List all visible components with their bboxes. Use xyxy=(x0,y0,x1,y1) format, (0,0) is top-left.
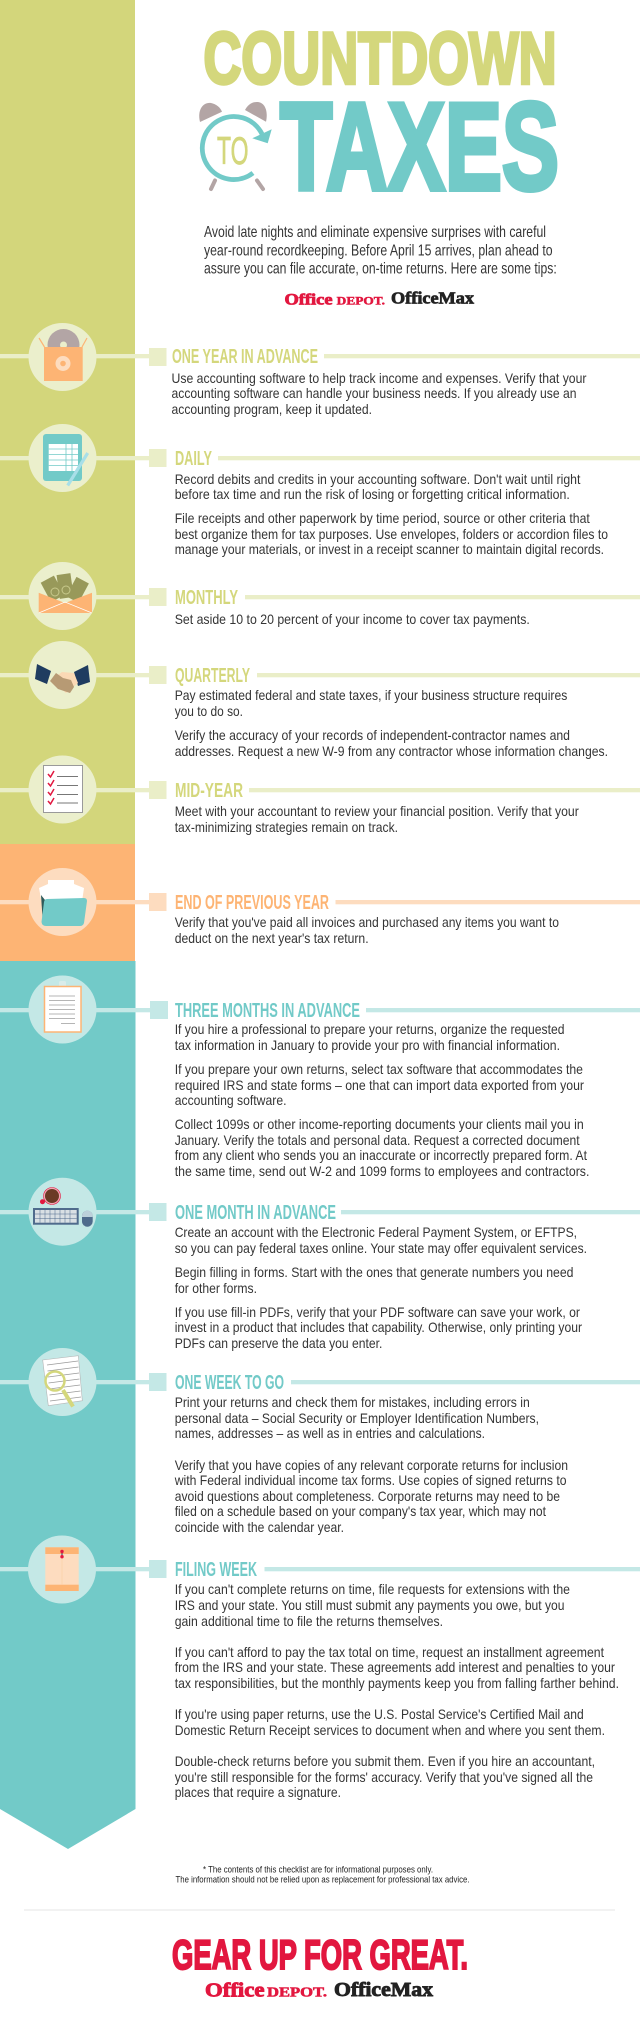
connector line xyxy=(0,456,150,460)
connector line xyxy=(0,788,150,792)
body text xyxy=(175,471,608,557)
heading rule xyxy=(264,1567,640,1571)
panel: one year in advance xyxy=(0,323,640,417)
body text: Meet with your accountant to review your financial position. Verify that your xyxy=(175,803,579,819)
heading rule xyxy=(245,595,640,599)
connector line xyxy=(0,1210,150,1214)
connector line xyxy=(0,1567,150,1571)
body text: the same time, send out W-2 and 1099 forms to employees and contractors. xyxy=(175,1163,589,1179)
body text: places that require a signature. xyxy=(175,1784,341,1800)
heading marker xyxy=(149,588,166,606)
heading marker xyxy=(149,348,166,366)
connector line xyxy=(0,673,150,677)
heading marker xyxy=(149,1560,166,1578)
heading: ONE YEAR IN ADVANCE xyxy=(172,345,318,368)
body text xyxy=(175,687,608,759)
body text: so you can pay federal taxes online. Your state may offer equivalent services. xyxy=(175,1240,587,1256)
heading marker xyxy=(149,1373,166,1391)
body text: If you can't complete returns on time, file requests for extensions with the xyxy=(175,1581,570,1597)
body text: personal data – Social Security or Employer Identification Numbers, xyxy=(175,1410,539,1426)
icon: alarm clock with TO: TO xyxy=(217,130,248,173)
body text: coincide with the calendar year. xyxy=(175,1519,344,1535)
body text: accounting program, keep it updated. xyxy=(172,401,372,417)
body text: January. Verify the totals and personal data. Request a corrected document xyxy=(175,1132,580,1148)
heading rule xyxy=(366,1008,640,1012)
body text: Verify the accuracy of your records of independent-contractor names and xyxy=(175,727,570,743)
timeline strip: green section xyxy=(0,0,135,844)
heading marker xyxy=(149,893,166,911)
heading: ONE MONTH IN ADVANCE xyxy=(175,1201,336,1224)
body text: Record debits and credits in your accounting software. Don't wait until right xyxy=(175,471,580,487)
body text: required IRS and state forms – one that can import data exported from your xyxy=(175,1077,584,1093)
body text xyxy=(175,914,559,946)
panel: one week to go xyxy=(0,1348,640,1535)
body text: tax information in January to provide your pro with financial information. xyxy=(175,1037,560,1053)
icon: clasp envelope xyxy=(28,1536,96,1604)
icon: alarm clock with TO xyxy=(199,102,272,189)
panel: one month in advance xyxy=(0,1178,640,1351)
heading marker xyxy=(149,666,166,684)
logos: Office Depot and OfficeMax: Office xyxy=(284,292,332,308)
intro text: Avoid late nights and eliminate expensive surprises with careful xyxy=(204,224,546,241)
icon: notebook with pen xyxy=(28,424,96,492)
disclaimer note: * The contents of this checklist are for informational purposes only. xyxy=(203,1864,433,1876)
disclaimer note: The information should not be relied upon as replacement for professional tax advice. xyxy=(176,1874,470,1886)
timeline strip: orange section xyxy=(0,844,135,961)
body text: If you prepare your own returns, select tax software that accommodates the xyxy=(175,1061,583,1077)
footer logos: Office Depot and OfficeMax xyxy=(205,1979,434,2002)
body text: Print your returns and check them for mistakes, including errors in xyxy=(175,1394,530,1410)
body text: deduct on the next year's tax return. xyxy=(175,930,369,946)
body text xyxy=(175,1581,619,1800)
body text: invest in a product that includes that capability. Otherwise, only printing your xyxy=(175,1319,582,1335)
footer logos: Office Depot and OfficeMax: Office xyxy=(205,1980,265,2002)
body text: IRS and your state. You still must submit any payments you owe, but you xyxy=(175,1597,564,1613)
icon: folder with papers xyxy=(28,868,96,936)
heading: THREE MONTHS IN ADVANCE xyxy=(175,999,360,1022)
body text xyxy=(175,803,579,835)
panel: monthly xyxy=(0,562,640,630)
timeline strip: teal section with arrow tip xyxy=(0,961,136,1849)
body text xyxy=(175,1224,587,1351)
icon: software box with disc xyxy=(28,323,96,391)
logos: Office Depot and OfficeMax: DEPOT. xyxy=(337,296,385,308)
icon: checklist xyxy=(28,756,96,824)
heading rule xyxy=(336,900,640,904)
body text: Use accounting software to help track income and expenses. Verify that your xyxy=(172,370,587,386)
body text: before tax time and run the risk of losing or forgetting critical information. xyxy=(175,486,570,502)
heading: DAILY xyxy=(175,447,212,470)
disclaimer note xyxy=(176,1864,470,1886)
heading: MONTHLY xyxy=(175,586,238,609)
footer logos: Office Depot and OfficeMax: OfficeMax xyxy=(334,1979,434,2001)
body text: Begin filling in forms. Start with the ones that generate numbers you need xyxy=(175,1264,573,1280)
body text: names, addresses – as well as in entries and calculations. xyxy=(175,1425,485,1441)
body text: Create an account with the Electronic Federal Payment System, or EFTPS, xyxy=(175,1224,577,1240)
body text: with Federal individual income tax forms. Use copies of signed returns to xyxy=(174,1472,567,1488)
body text xyxy=(175,1021,589,1179)
body text xyxy=(174,1394,568,1535)
body text: you to do so. xyxy=(175,703,243,719)
heading rule xyxy=(324,354,640,358)
logos: Office Depot and OfficeMax: OfficeMax xyxy=(391,288,475,308)
body text: gain additional time to file the returns themselves. xyxy=(175,1613,443,1629)
connector line xyxy=(0,900,150,904)
panel: daily xyxy=(0,424,640,557)
body text: from any client who sends you an inaccurate or incorrectly prepared form. At xyxy=(175,1147,587,1163)
body text: avoid questions about completeness. Corporate returns may need to be xyxy=(175,1488,560,1504)
body text: Collect 1099s or other income-reporting documents your clients mail you in xyxy=(175,1116,584,1132)
heading marker xyxy=(150,1001,168,1019)
footer slogan: GEAR UP FOR GREAT. xyxy=(172,1931,468,1978)
body text: Verify that you've paid all invoices and purchased any items you want to xyxy=(175,914,559,930)
body text: If you use fill-in PDFs, verify that your PDF software can save your work, or xyxy=(175,1304,580,1320)
footer logos: Office Depot and OfficeMax: DEPOT. xyxy=(267,1986,327,2001)
body text: Set aside 10 to 20 percent of your income to cover tax payments. xyxy=(175,611,530,627)
connector line xyxy=(0,595,150,599)
body text: filed on a schedule based on your company's tax year, which may not xyxy=(175,1503,546,1519)
icon: envelope with money xyxy=(28,562,96,630)
heading marker xyxy=(149,781,166,799)
body text: If you're using paper returns, use the U.S. Postal Service's Certified Mail and xyxy=(175,1706,584,1722)
icon: document with magnifier xyxy=(28,1348,96,1416)
heading: END OF PREVIOUS YEAR xyxy=(175,891,329,914)
icon: clipboard xyxy=(28,976,96,1044)
connector line xyxy=(0,1008,151,1012)
icon: coffee, keyboard and mouse xyxy=(28,1178,96,1246)
body text: Verify that you have copies of any relevant corporate returns for inclusion xyxy=(175,1457,568,1473)
heading: ONE WEEK TO GO xyxy=(175,1371,284,1394)
body text: accounting software can handle your business needs. If you already use an xyxy=(172,385,576,401)
heading marker xyxy=(149,449,166,467)
heading marker xyxy=(149,1203,166,1221)
panel: mid-year xyxy=(0,756,640,835)
icon: handshake xyxy=(28,641,96,709)
body text: tax-minimizing strategies remain on track. xyxy=(175,819,398,835)
heading rule xyxy=(257,673,640,677)
panel: three months in advance xyxy=(0,976,640,1179)
connector line xyxy=(0,354,150,358)
body text: accounting software. xyxy=(175,1092,286,1108)
connector line xyxy=(0,1380,150,1384)
heading rule xyxy=(249,788,640,792)
heading: MID-YEAR xyxy=(175,779,243,802)
body text xyxy=(172,370,587,417)
body text: PDFs can preserve the data you enter. xyxy=(175,1335,382,1351)
body text: File receipts and other paperwork by time period, source or other criteria that xyxy=(175,510,590,526)
intro text xyxy=(204,224,557,278)
logos: Office Depot and OfficeMax xyxy=(284,288,475,308)
body text: If you hire a professional to prepare your returns, organize the requested xyxy=(175,1021,564,1037)
body text: for other forms. xyxy=(175,1280,257,1296)
panel: quarterly xyxy=(0,641,640,759)
heading rule xyxy=(291,1380,640,1384)
heading rule xyxy=(341,1210,640,1214)
panel: end of previous year xyxy=(0,868,640,946)
body text: Pay estimated federal and state taxes, if your business structure requires xyxy=(175,687,567,703)
panel: filing week xyxy=(0,1536,640,1800)
heading: FILING WEEK xyxy=(175,1558,257,1581)
heading: QUARTERLY xyxy=(175,664,250,687)
heading rule xyxy=(218,456,640,460)
